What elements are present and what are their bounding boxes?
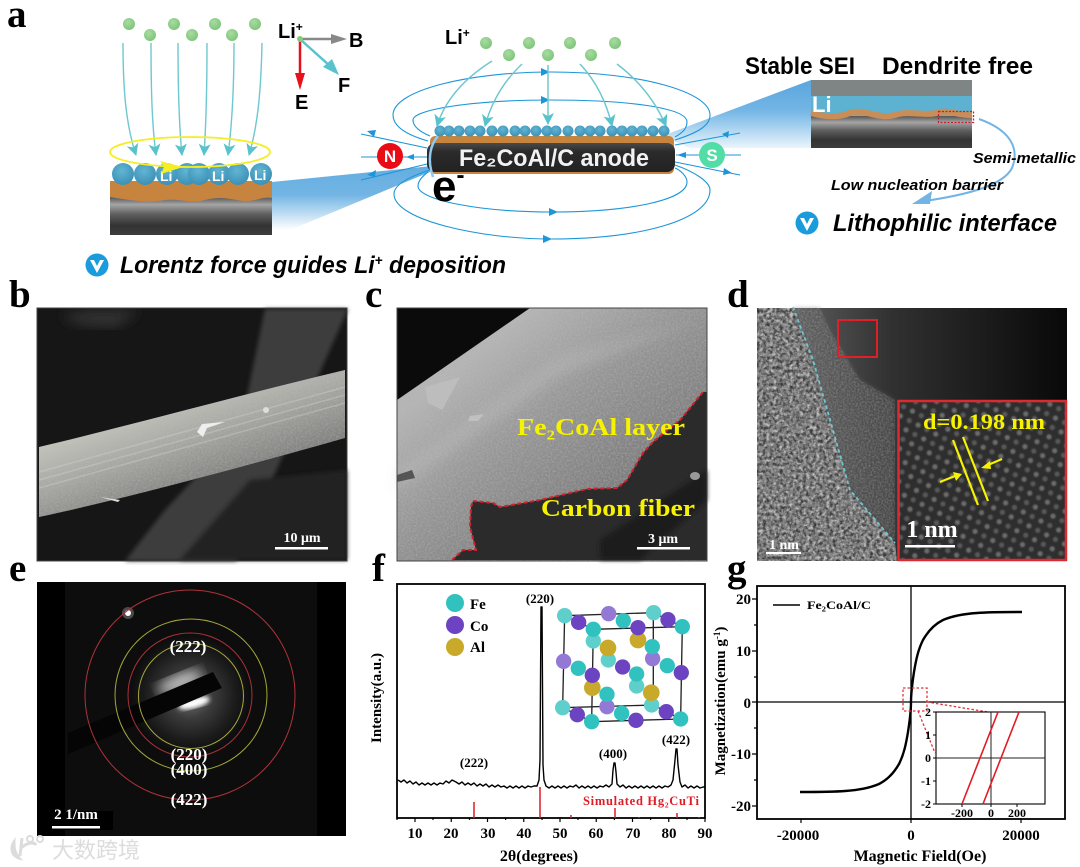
label e: e [9, 547, 26, 590]
Li labels on spheres: Li [254, 167, 266, 183]
x axis labels: 60 [588, 826, 604, 842]
x axis ticks [397, 818, 705, 822]
x axis title: Magnetic Field(Oe) [854, 848, 986, 865]
anode rod [427, 136, 675, 177]
yellow circulating ring [110, 137, 270, 174]
inset chart: 1 [925, 728, 931, 742]
lithium spheres left [112, 163, 272, 185]
selected area square [838, 320, 877, 357]
Li labels on spheres: Li [160, 168, 172, 184]
legend: Fe₂CoAl/C [807, 598, 871, 612]
x axis labels: 20000 [1002, 828, 1040, 844]
legend atoms: Co [470, 619, 488, 635]
icon check right [796, 212, 818, 234]
label carbon fiber: Carbon fiber [541, 496, 695, 522]
x axis labels: 90 [698, 826, 712, 842]
label d: d [727, 273, 749, 316]
vector diagram [278, 20, 363, 114]
vector diagram: + [296, 20, 303, 34]
x axis labels: 50 [552, 826, 568, 842]
SEI zoom block: Li [812, 92, 832, 117]
x axis labels: 0 [907, 828, 915, 844]
inset chart: 2 [925, 705, 931, 719]
label c: c [365, 273, 382, 316]
panel f: XRD chart [369, 547, 712, 865]
x axis labels [777, 828, 1040, 844]
peak labels [460, 591, 690, 770]
y axis title: Magnetization(emu g [713, 639, 729, 775]
simulated label: Simulated Hg₂CuTi [583, 794, 700, 808]
inset chart [921, 705, 1045, 820]
inset chart: -2 [921, 797, 931, 811]
electron label: e [432, 162, 456, 211]
y axis labels [731, 592, 751, 815]
scale bar b: 10 μm [283, 531, 321, 546]
y axis labels: 20 [736, 592, 751, 608]
zero axes [757, 586, 1065, 819]
simulated reference lines [474, 787, 699, 818]
panel a: Lorentz force schematic [7, 0, 1077, 279]
ring labels: (222) [170, 637, 206, 656]
scale bar e: 2 1/nm [54, 807, 98, 823]
blue zoom wedge left [272, 166, 432, 230]
legend atoms: Al [470, 640, 485, 656]
panel c: SEM image of layer [365, 273, 707, 561]
label b: b [9, 273, 31, 316]
x axis labels: 80 [662, 826, 676, 842]
y axis title: Intensity(a.u.) [369, 653, 385, 743]
caption Lorentz force: Lorentz force guides Li [120, 252, 384, 279]
label g: g [727, 547, 747, 590]
caption Lorentz force: deposition [383, 252, 506, 279]
vector diagram: B [349, 30, 363, 52]
hysteresis curve [800, 612, 1022, 792]
x axis labels: 30 [480, 826, 496, 842]
zoom guide box [903, 688, 988, 753]
heading dendrite free: Dendrite free [882, 53, 1033, 80]
crystal structure [555, 605, 690, 729]
y axis labels: -10 [731, 747, 751, 763]
peak labels: (400) [599, 746, 627, 761]
vector diagram: E [295, 92, 308, 114]
heading stable SEI: Stable SEI [745, 53, 855, 80]
XRD trace [398, 607, 705, 788]
label low nucleation barrier: Low nucleation barrier [831, 177, 1004, 194]
legend atoms: Fe [470, 597, 486, 613]
watermark [12, 836, 140, 863]
caption lithophilic interface: Lithophilic interface [833, 210, 1057, 237]
SEM micrograph [397, 308, 707, 561]
legend [773, 598, 871, 612]
inset chart: 200 [1008, 806, 1026, 820]
peak labels: (422) [662, 732, 690, 747]
Li+ ions centre [480, 37, 621, 61]
scale bar b [275, 531, 328, 550]
d spacing label: d=0.198 nm [923, 409, 1045, 434]
axis ticks [752, 599, 1021, 823]
x axis labels: 10 [408, 826, 422, 842]
S pole [699, 142, 725, 168]
plot frame [397, 584, 705, 818]
inset chart: -200 [951, 806, 973, 820]
panel g: magnetization chart [712, 547, 1065, 865]
inset chart: -1 [921, 774, 931, 788]
x axis labels: 70 [626, 826, 640, 842]
x axis title: 2θ(degrees) [500, 848, 578, 865]
ion path arrows left [123, 43, 262, 155]
legend atoms [446, 594, 488, 656]
Li+ ions left [123, 18, 261, 41]
label semi-metallic: Semi-metallic [973, 150, 1077, 167]
SAED image [37, 582, 346, 836]
anode label: Fe₂CoAl/C anode [459, 145, 649, 172]
inset lattice image [898, 401, 1066, 560]
vector diagram: F [338, 75, 350, 97]
scale bar c: 3 μm [648, 532, 678, 547]
label f: f [372, 547, 386, 590]
x axis labels: 20 [444, 826, 458, 842]
field line arrowheads [367, 68, 732, 243]
vector diagram: Li [278, 21, 296, 43]
y axis title: ) [713, 627, 729, 632]
y axis labels: 10 [736, 644, 751, 660]
HRTEM micrograph [757, 307, 1067, 561]
N pole [377, 143, 403, 169]
diffraction rings [85, 590, 295, 800]
label layer: Fe₂CoAl layer [517, 415, 685, 441]
Li+ label centre: Li [445, 27, 463, 49]
lattice spacing lines and arrows [940, 437, 1002, 505]
plot frame [757, 586, 1065, 819]
magnetic field lines [361, 72, 741, 239]
peak labels: (220) [526, 591, 554, 606]
S pole: S [706, 146, 718, 165]
x axis labels [408, 826, 712, 842]
panel e: diffraction pattern [9, 547, 346, 836]
caption Lorentz force: + [375, 252, 383, 268]
icon check left [86, 254, 108, 276]
inset chart: 0 [925, 751, 931, 765]
electron label: - [456, 162, 464, 189]
ring labels: (220) [171, 745, 207, 764]
scale bar d: 1 nm [769, 538, 799, 553]
SEM micrograph [37, 308, 348, 561]
inset chart: 0 [988, 806, 994, 820]
Li labels on spheres: Li [212, 168, 224, 184]
Li labels on spheres [160, 167, 266, 184]
electrode block left [110, 181, 272, 235]
ion path arrows centre [437, 61, 666, 126]
inset scale bar: 1 nm [906, 517, 958, 543]
y axis labels: 0 [744, 696, 751, 712]
scale bar c [637, 532, 690, 550]
x axis labels: -20000 [777, 828, 819, 844]
x axis labels: 40 [516, 826, 532, 842]
y axis labels: -20 [731, 799, 751, 815]
panel d: HRTEM image [727, 273, 1067, 561]
curved arrow to lithophilic interface [912, 119, 1015, 204]
ring labels: (422) [171, 790, 207, 809]
SEI zoom block [811, 80, 974, 148]
ring labels: (400) [171, 760, 207, 779]
Li+ label centre: + [463, 26, 470, 40]
ring labels [170, 637, 207, 809]
blue zoom wedge right [662, 80, 811, 148]
peak labels: (222) [460, 755, 488, 770]
panel b: SEM image of fibre [9, 273, 348, 561]
N pole: N [384, 147, 396, 166]
scale bar e [37, 807, 113, 830]
lithium spheres row [434, 126, 670, 136]
y axis title: -1 [712, 631, 722, 639]
watermark: 大数跨境 [52, 838, 140, 863]
